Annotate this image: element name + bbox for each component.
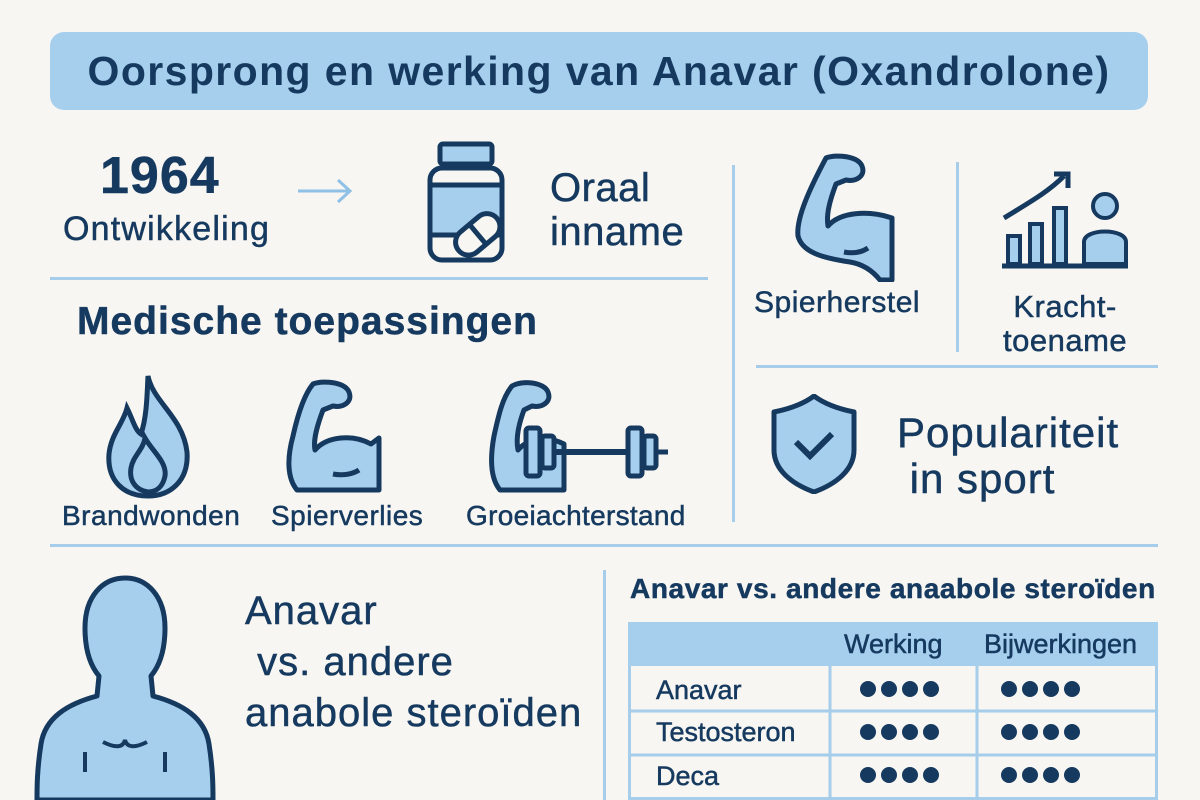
text: Anavar vs. andere anabole steroïden: Anavar	[245, 589, 378, 633]
text: Anavar vs. andere anabole steroïden: vs. andere	[257, 640, 454, 684]
comparison table: Testosteron	[656, 717, 796, 747]
icon: body silhouette	[34, 576, 216, 800]
title banner	[50, 32, 1148, 110]
label: Spierverlies: Spierverlies	[271, 500, 423, 531]
title banner: Oorsprong en werking van Anavar (Oxandrolone)	[88, 48, 1110, 94]
icon: flame	[106, 376, 190, 498]
text: Populariteit in sport: in sport	[910, 455, 1055, 502]
heading: Medische toepassingen: Medische toepassingen	[77, 300, 538, 343]
label: Kracht-toename	[1003, 289, 1127, 358]
label: Groeiachterstand: Groeiachterstand	[466, 500, 686, 531]
text: Oraal inname: Oraal	[550, 166, 650, 210]
text: Populariteit in sport: Populariteit	[897, 409, 1119, 456]
text: Populariteit in sport	[897, 409, 1119, 502]
label: Kracht-toename: toename	[1003, 323, 1127, 358]
comparison table: Werking	[844, 629, 943, 659]
label: Brandwonden: Brandwonden	[62, 500, 240, 531]
comparison table: Bijwerkingen	[984, 629, 1137, 659]
year 1964: 1964	[100, 147, 220, 205]
table heading: Anavar vs. andere anaabole steroïden	[630, 573, 1156, 604]
icon: shield check	[772, 394, 856, 494]
icon: pill bottle	[428, 142, 504, 262]
icon: arm spierherstel	[795, 154, 894, 282]
arrow	[298, 179, 352, 203]
comparison table: Deca	[656, 761, 719, 791]
text: Anavar vs. andere anabole steroïden	[244, 589, 582, 735]
label: Spierherstel: Spierherstel	[754, 286, 920, 319]
label: Kracht-toename: Kracht-	[1013, 289, 1117, 324]
text: Anavar vs. andere anabole steroïden: anabole steroïden	[245, 691, 582, 735]
comparison table: Anavar	[656, 675, 742, 705]
icon: arm with dumbbell	[489, 380, 668, 492]
icon: strength chart	[1002, 172, 1128, 268]
comparison table	[628, 622, 1158, 800]
text: Oraal inname: inname	[550, 210, 684, 254]
text: Oraal inname	[550, 166, 684, 254]
icon: flexed arm	[286, 380, 382, 492]
text: Ontwikkeling: Ontwikkeling	[63, 210, 270, 248]
